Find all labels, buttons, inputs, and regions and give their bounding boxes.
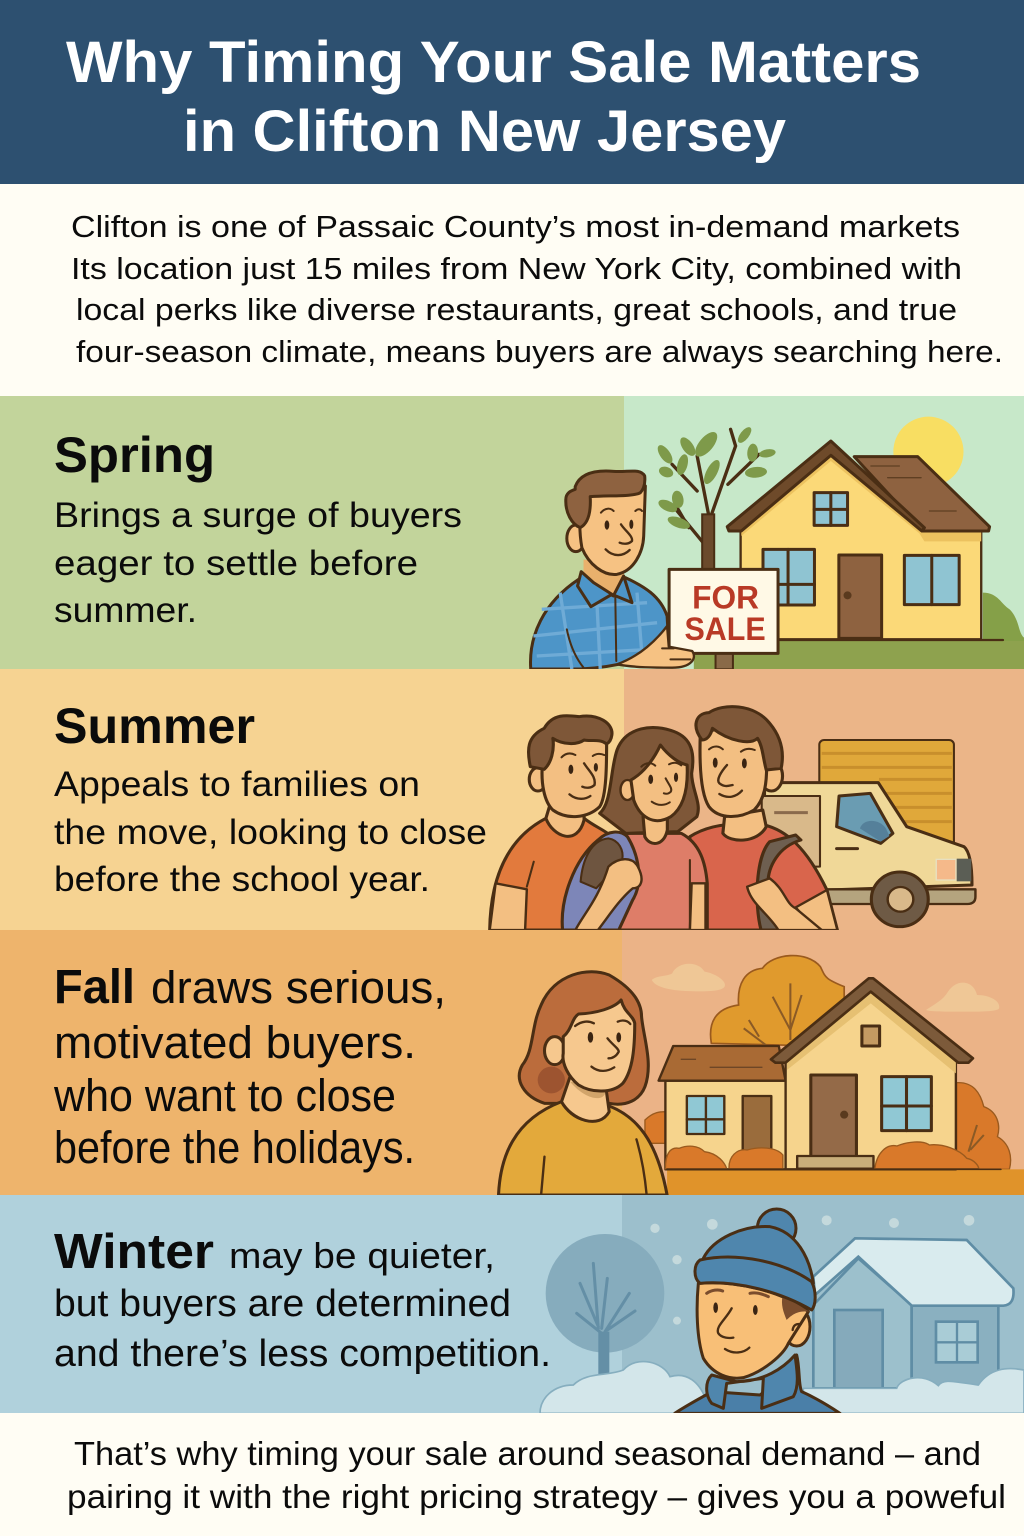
intro text: Its location just 15 miles from New York City, combined with (71, 251, 962, 286)
summer text: Appeals to families on (54, 765, 420, 804)
winter text: Winter (54, 1225, 214, 1279)
icon: mother in middle (600, 728, 707, 930)
winter text: but buyers are determined (54, 1283, 511, 1325)
icon: bare tree (546, 1234, 664, 1387)
icon: snow drifts (540, 1362, 1024, 1413)
title: Why Timing Your Sale Matters (66, 30, 921, 95)
icon: snowy house (813, 1238, 1014, 1388)
icon: for sale sign (669, 569, 778, 669)
fall text: motivated buyers. (54, 1017, 416, 1068)
panel: spring (0, 396, 1024, 669)
summer illustration (490, 707, 975, 930)
icon: shrubs (665, 1142, 979, 1169)
fall text: draws serious, (151, 962, 446, 1013)
intro text (71, 209, 1003, 369)
winter text: and there’s less competition. (54, 1333, 551, 1375)
fall text (53, 961, 446, 1173)
icon: autumn tree (711, 956, 844, 1047)
fall text: who want to close (53, 1070, 396, 1121)
icon: son on left (490, 716, 612, 930)
panel: summer (0, 669, 1024, 930)
spring heading: Spring (54, 427, 215, 483)
icon: sun (893, 417, 964, 487)
summer text: before the school year. (54, 860, 430, 899)
icon: ground and bushes (694, 593, 1024, 669)
icon: bushes behind house (645, 1083, 1011, 1169)
panel: fall (0, 930, 1024, 1195)
summer text (54, 765, 487, 899)
icon: house (727, 441, 1003, 640)
footer panel (0, 1413, 1024, 1536)
spring text: Brings a surge of buyers (54, 496, 462, 535)
intro text: four-season climate, means buyers are always searching here. (76, 334, 1003, 369)
winter illustration (540, 1209, 1024, 1413)
icon: clouds (652, 964, 999, 1012)
fall text: Fall (54, 961, 135, 1014)
spring illustration (531, 417, 1024, 669)
icon: hand (617, 626, 694, 668)
intro panel (0, 184, 1024, 396)
icon: woman in yellow sweater (499, 972, 667, 1195)
summer heading: Summer (54, 698, 255, 754)
title: in Clifton New Jersey (183, 99, 786, 164)
footer text: That’s why timing your sale around seasonal demand – and (74, 1435, 981, 1472)
summer text: the move, looking to close (54, 813, 487, 852)
icon: moving truck (762, 740, 975, 927)
icon: man in beanie (675, 1209, 840, 1413)
icon: snowflakes (650, 1215, 974, 1325)
icon: main house (771, 978, 973, 1169)
icon: man in plaid shirt (531, 471, 669, 669)
spring text: summer. (54, 591, 197, 630)
icon: for sale sign: FOR (692, 579, 759, 615)
icon: backpack (562, 832, 642, 930)
icon: tree (655, 425, 776, 571)
winter text (54, 1225, 551, 1375)
winter text: may be quieter, (229, 1235, 495, 1276)
intro text: Clifton is one of Passaic County’s most in-demand markets (71, 209, 960, 244)
icon: small house (659, 1046, 786, 1169)
intro text: local perks like diverse restaurants, great schools, and true (76, 292, 957, 327)
icon: for sale sign: SALE (684, 611, 766, 647)
spring text (54, 496, 462, 630)
footer text: pairing it with the right pricing strategy – gives you a poweful (67, 1478, 1006, 1515)
spring text: eager to settle before (54, 544, 418, 583)
fall text: before the holidays. (54, 1122, 415, 1173)
footer text (67, 1435, 1006, 1515)
icon: ground (667, 1169, 1024, 1195)
header banner (0, 0, 1024, 184)
panel: winter (0, 1195, 1024, 1413)
fall illustration (499, 956, 1024, 1195)
icon: father on right (688, 707, 837, 930)
title (66, 30, 921, 164)
